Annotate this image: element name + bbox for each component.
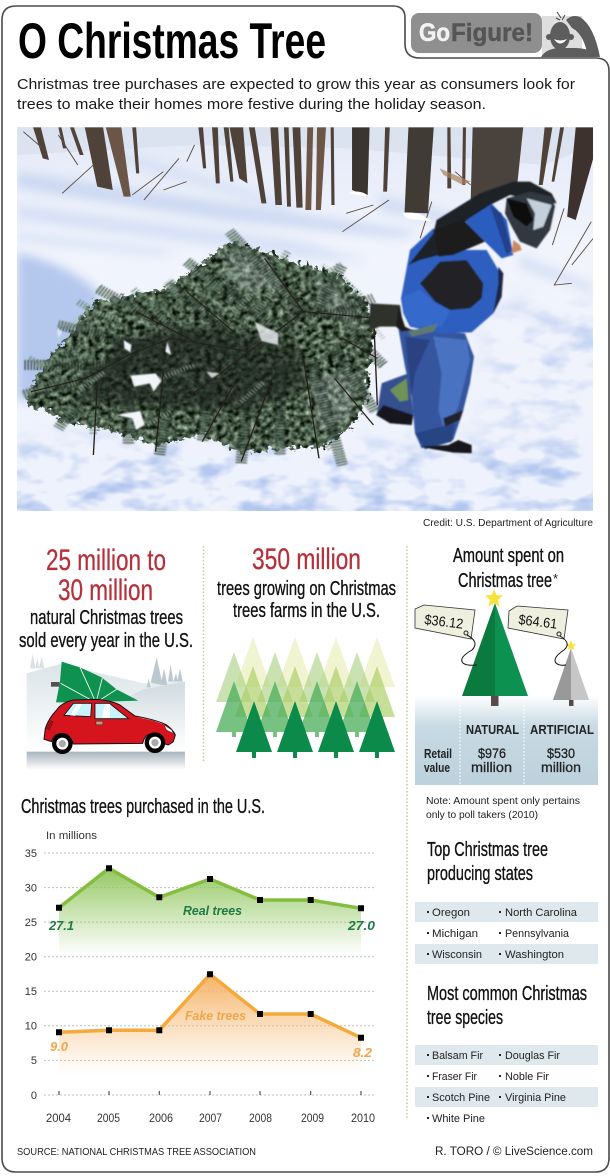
list: common species: Douglas Fir	[505, 1050, 560, 1062]
list: common species: Virginia Pine	[505, 1092, 566, 1104]
series: fake trees	[50, 971, 373, 1075]
icon: red car with tree on roof	[27, 654, 185, 770]
series: fake trees: Fake trees	[185, 1008, 246, 1023]
child in snowsuit	[370, 182, 557, 453]
note	[426, 795, 580, 821]
list: top producing states: Michigan	[432, 928, 478, 940]
panel: retail value table: million	[541, 759, 581, 775]
icon: natural tree with price tag	[415, 589, 528, 706]
icon: artificial tree with price tag: $64.61	[518, 611, 558, 632]
panel: retail value table	[415, 695, 598, 785]
panel: retail value table: $976	[478, 745, 506, 761]
light branches	[23, 232, 383, 465]
y axis labels: 20	[25, 952, 37, 964]
panel: retail value table: $530	[547, 745, 575, 761]
list: top producing states: North Carolina	[505, 907, 578, 919]
list: common species: tree species	[427, 1007, 503, 1029]
stat: trees sold each year: sold every year in the U.S.	[19, 630, 193, 652]
stat: trees sold each year	[19, 544, 193, 652]
icon: artificial tree with price tag	[508, 606, 589, 706]
snow clumps	[56, 322, 278, 430]
divider	[406, 546, 408, 1120]
list: common species: Scotch Pine	[432, 1092, 490, 1104]
list: common species: Balsam Fir	[432, 1050, 483, 1062]
byline: R. TORO / © LiveScience.com	[435, 1146, 593, 1158]
series: fake trees: 9.0	[50, 1039, 69, 1054]
y axis labels: 5	[31, 1055, 37, 1067]
dark branches	[23, 232, 383, 465]
series: fake trees: 8.2	[353, 1045, 373, 1060]
intro text: trees to make their homes more festive during the holiday season.	[17, 96, 486, 113]
logo: GoFigure badge: Figure!	[451, 19, 533, 47]
stat: trees growing on farms	[217, 543, 396, 622]
y axis labels: 25	[25, 917, 37, 929]
list: top producing states: Wisconsin	[432, 949, 482, 961]
photo: child dragging a Christmas tree through snow	[0, 127, 610, 545]
intro text	[17, 76, 575, 113]
heading: amount spent: Amount spent on	[453, 545, 564, 567]
x axis labels: 2008	[249, 1113, 272, 1125]
line chart: trees purchased: In millions	[46, 830, 98, 842]
list: top producing states: Washington	[505, 949, 564, 961]
snow dapples right	[490, 310, 610, 440]
line chart: trees purchased	[25, 830, 376, 1125]
list: common species: Fraser Fir	[432, 1071, 477, 1083]
stat: trees growing on farms: trees farms in the U.S.	[233, 600, 380, 622]
y axis labels: 0	[31, 1090, 37, 1102]
panel: retail value table: value	[424, 760, 450, 775]
series: real trees: 27.1	[48, 918, 74, 933]
forest background	[18, 127, 593, 285]
snow shadows	[17, 150, 593, 400]
panel: retail value table: Retail	[424, 746, 452, 761]
photo credit: Credit: U.S. Department of Agriculture	[423, 517, 593, 529]
source: SOURCE: NATIONAL CHRISTMAS TREE ASSOCIATION	[17, 1146, 256, 1158]
x axis labels	[46, 1113, 375, 1125]
divider	[202, 546, 204, 763]
mid branches	[23, 232, 383, 465]
y axis labels: 30	[25, 882, 37, 894]
stat: trees growing on farms: trees growing on Christmas	[217, 578, 396, 600]
heading: amount spent: Christmas tree	[458, 570, 552, 592]
series: real trees: Real trees	[183, 903, 242, 918]
panel: retail value table: ARTIFICIAL	[530, 722, 594, 737]
note: only to poll takers (2010)	[426, 809, 538, 821]
y axis labels	[25, 848, 37, 1102]
x axis labels: 2006	[149, 1113, 173, 1125]
heading: amount spent	[453, 545, 564, 592]
logo: GoFigure badge: Go	[419, 19, 450, 47]
x axis labels: 2005	[97, 1113, 120, 1125]
x axis labels: 2007	[199, 1113, 222, 1125]
series: real trees	[48, 865, 376, 955]
list: common species	[415, 983, 598, 1125]
icon: natural tree with price tag: $36.12	[424, 611, 464, 632]
series: real trees: 27.0	[347, 918, 376, 933]
y axis labels: 10	[25, 1020, 37, 1032]
intro text: Christmas tree purchases are expected to grow this year as consumers look for	[17, 76, 575, 93]
evergreen tree	[23, 232, 383, 465]
list: top producing states: Top Christmas tree	[427, 839, 548, 861]
x axis labels: 2009	[301, 1113, 324, 1125]
chart title: Christmas trees purchased in the U.S.	[21, 796, 265, 818]
icon: rows of evergreen trees	[216, 637, 395, 758]
main stems	[31, 258, 377, 462]
y axis labels: 15	[25, 986, 37, 998]
list: common species: Noble Fir	[505, 1071, 549, 1083]
logo: GoFigure badge	[411, 12, 600, 57]
snow dapples	[17, 430, 593, 511]
list: top producing states: producing states	[427, 863, 533, 885]
panel: retail value table: NATURAL	[466, 722, 519, 737]
stat: trees sold each year: 25 million to	[46, 544, 166, 577]
panel: retail value table: million	[471, 759, 512, 775]
title: O Christmas Tree	[18, 13, 326, 69]
stat: trees sold each year: 30 million	[58, 574, 153, 607]
list: top producing states: Pennsylvania	[505, 928, 570, 940]
list: top producing states: Oregon	[432, 907, 470, 919]
list: common species: White Pine	[432, 1113, 485, 1125]
stat: trees growing on farms: 350 million	[252, 543, 361, 576]
stat: trees sold each year: natural Christmas trees	[30, 607, 183, 629]
y axis labels: 35	[25, 848, 37, 860]
note: Note: Amount spent only pertains	[426, 795, 580, 807]
heading: amount spent: *	[553, 571, 558, 586]
list: top producing states	[415, 839, 598, 964]
x axis labels: 2004	[46, 1113, 72, 1125]
x axis labels: 2010	[351, 1113, 375, 1125]
